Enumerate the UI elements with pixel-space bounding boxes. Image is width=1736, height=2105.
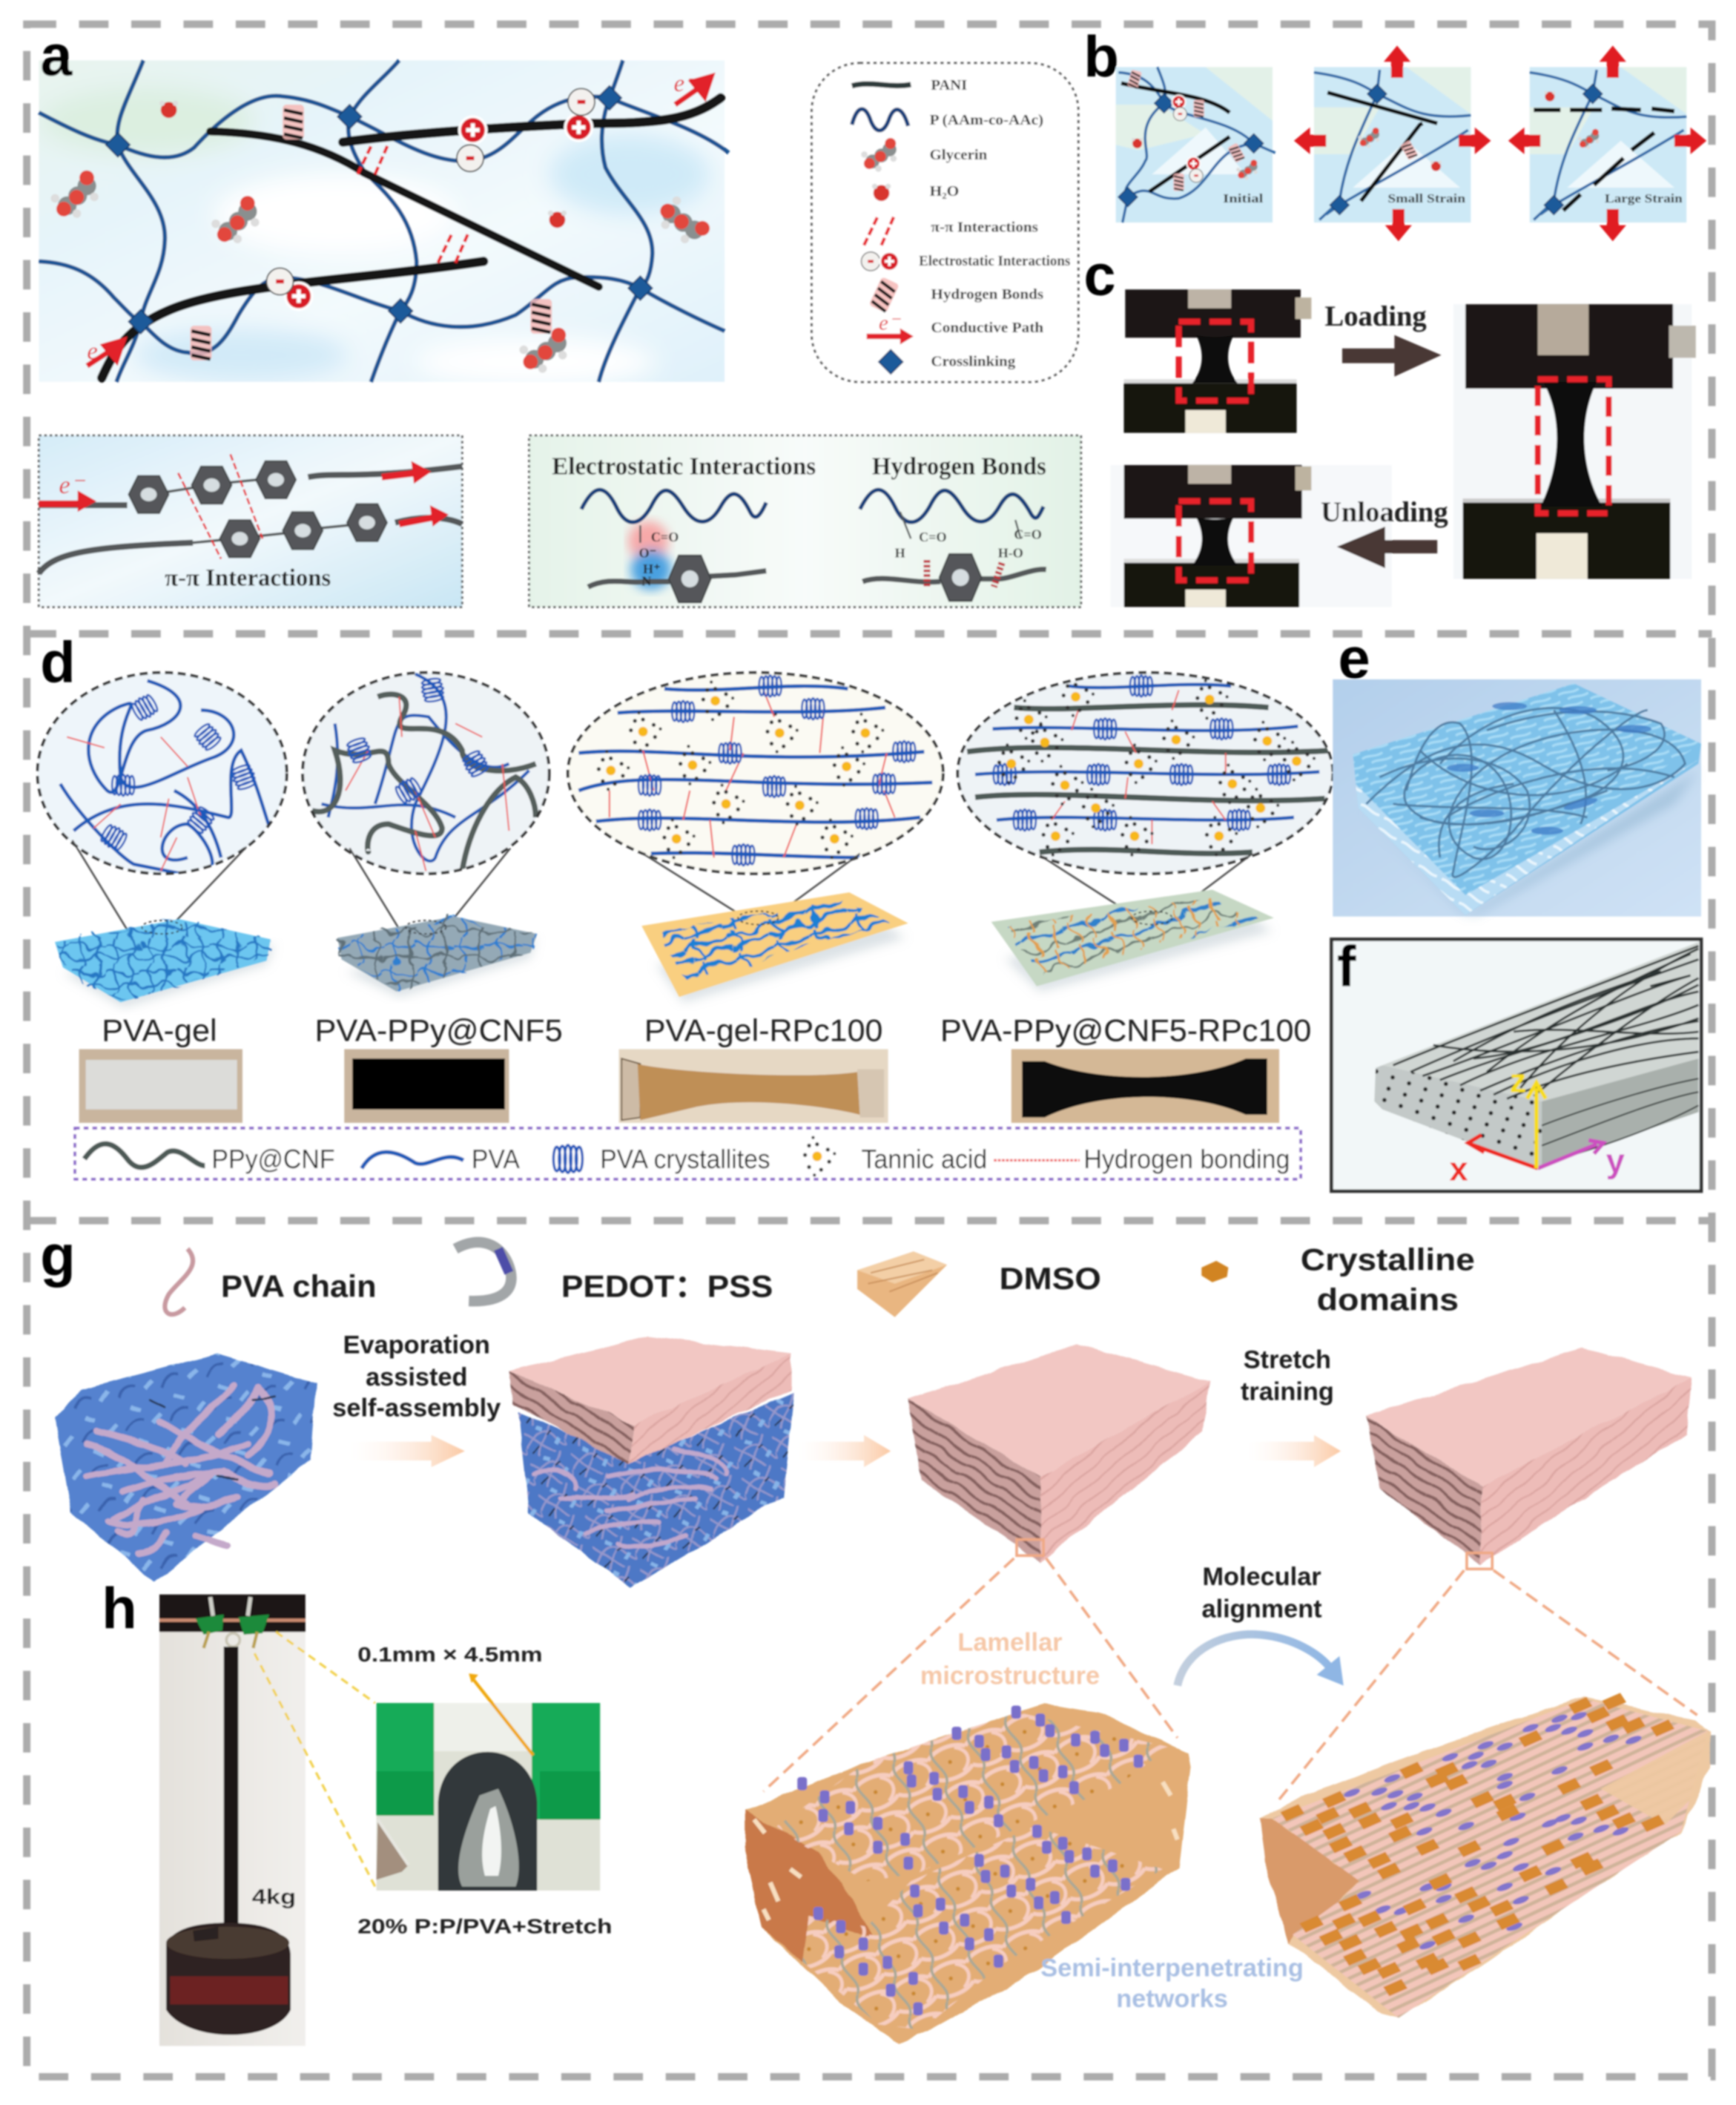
hydrogen bonds	[190, 105, 552, 360]
weave lower region	[802, 1826, 1163, 2030]
sample names: PVA-gel-RPc100	[644, 1013, 882, 1048]
b initial state	[1116, 67, 1275, 223]
label PEDOT PSS: PEDOT：PSS	[561, 1269, 773, 1304]
orange crystalline domains	[1280, 1693, 1674, 1996]
legend row	[165, 1242, 1475, 1317]
panel g letter: g	[40, 1225, 76, 1288]
arrow 2	[797, 1435, 891, 1467]
lower block aligned	[1261, 1693, 1711, 2017]
panel e letter: e	[1339, 627, 1370, 691]
legend icons	[852, 84, 914, 374]
brown end face	[745, 1810, 874, 1962]
grey backbones and rings	[588, 512, 1046, 587]
cube with pink film	[509, 1336, 794, 1588]
panel h: load photo	[102, 1577, 612, 2046]
panel a letter: a	[40, 24, 73, 88]
axes labels: x	[1449, 1150, 1468, 1188]
legend frame	[75, 1128, 1301, 1179]
purple PEDOT dots	[797, 1705, 1143, 2015]
legend row: domains	[1317, 1282, 1459, 1317]
semi-interpenetrating label: Semi-interpenetrating	[1040, 1954, 1304, 1982]
crystallites in slab	[1447, 702, 1651, 834]
panel f letter: f	[1337, 935, 1357, 999]
panel d letter: d	[40, 631, 76, 695]
panel f: aligned fiber block	[1331, 935, 1701, 1191]
legend labels: P (AAm-co-AAc)	[930, 112, 1043, 128]
process step label: Evaporation	[343, 1331, 490, 1360]
lamellar microstructure label: Lamellar	[957, 1629, 1063, 1657]
sample label: 20% P:P/PVA+Stretch	[357, 1915, 612, 1938]
b large strain state	[1530, 67, 1686, 223]
chemical group labels	[639, 527, 1042, 588]
slab background	[1333, 679, 1701, 917]
electron arrows	[39, 461, 449, 527]
electron arrows: e⁻	[59, 471, 86, 499]
panel g: lamellar self-assembly	[40, 1225, 1711, 2043]
conductive path arrows: e⁻	[87, 338, 113, 365]
step label stretch training: Stretch	[1244, 1345, 1331, 1374]
icon PVA chain	[165, 1249, 193, 1314]
fibre lines	[1273, 1699, 1708, 2017]
axes labels: z	[1510, 1061, 1526, 1099]
network legend: PVA	[472, 1144, 521, 1174]
inset frame	[529, 435, 1081, 607]
legend labels: π-π Interactions	[931, 220, 1038, 236]
magnified PVA-gel-RPc100 network	[568, 673, 943, 912]
sample names: PVA-PPy@CNF5	[314, 1013, 563, 1048]
inset photo	[377, 1703, 600, 1891]
photo background	[159, 1595, 306, 2046]
legend labels: Electrostatic Interactions	[919, 253, 1071, 269]
legend labels: Hydrogen Bonds	[931, 286, 1043, 303]
panel e: hydrogel slab	[1333, 627, 1701, 917]
chemical group labels: C=O	[651, 530, 679, 544]
sample strip	[224, 1647, 239, 1944]
arrow 3	[1246, 1435, 1341, 1467]
magnified PVA-PPy@CNF5-RPc100 network	[958, 673, 1333, 915]
panel c: loading photos	[1083, 244, 1696, 607]
crosslink nodes	[106, 86, 653, 334]
label crystalline domains: Crystalline	[1301, 1242, 1475, 1277]
semi-interpenetrating label: networks	[1116, 1985, 1228, 2013]
legend labels: Conductive Path	[931, 320, 1043, 336]
chemical group labels: C=O	[919, 530, 946, 544]
chemical group labels: N	[641, 573, 651, 588]
arrow 1	[349, 1435, 465, 1467]
panel a: PANI network schematic	[39, 24, 729, 386]
green clips	[196, 1615, 269, 1648]
hydrogen bond ticks	[927, 560, 1002, 587]
legend labels: Glycerin	[930, 147, 987, 163]
sample names: PVA-gel	[102, 1013, 217, 1048]
inset headings: Electrostatic Interactions	[552, 452, 816, 481]
inset: pi-pi interactions	[39, 435, 462, 607]
step label stretch training	[1241, 1345, 1334, 1406]
blue hydrogel cube	[55, 1354, 316, 1582]
photo initial	[1124, 289, 1311, 433]
conductive path arrows: e⁻	[674, 70, 699, 97]
b small strain state: Small Strain	[1387, 191, 1466, 205]
magnified PVA-PPy@CNF5 network	[303, 673, 549, 932]
block top face	[1382, 942, 1698, 1101]
weight label: 4kg	[252, 1885, 296, 1909]
pi-pi dashes	[357, 143, 469, 263]
chemical group labels: H-O	[998, 546, 1023, 561]
b initial state: Initial	[1223, 191, 1264, 205]
chemical group labels: H	[895, 546, 905, 561]
block front face	[1374, 1065, 1542, 1168]
polymer waves	[581, 490, 1043, 522]
legend labels: PPy@CNF	[211, 1144, 335, 1174]
chemical group labels: C=O	[1014, 527, 1042, 541]
inset: electrostatic and hydrogen bonds: Hydrogen Bonds	[872, 452, 1046, 481]
block side face	[1542, 1058, 1698, 1166]
unloading label: Unloading	[1321, 496, 1448, 528]
water and glycerin molecules	[47, 101, 712, 373]
icon DMSO	[857, 1251, 947, 1317]
slab body	[1353, 683, 1701, 915]
red dashed stacking lines	[178, 454, 263, 559]
network background	[39, 60, 725, 386]
network legend	[75, 1128, 1301, 1179]
label PVA chain: PVA chain	[221, 1269, 377, 1304]
unloading arrow	[1337, 527, 1437, 568]
molecular alignment label: alignment	[1202, 1595, 1322, 1623]
legend labels: PANI	[931, 77, 967, 93]
purple PEDOT segments	[1342, 1710, 1643, 1951]
sample names	[102, 1013, 1311, 1048]
axes labels	[1449, 1061, 1625, 1188]
block body	[745, 1704, 1191, 2043]
network legend: PVA crystallites	[600, 1144, 770, 1174]
red strain arrows	[1294, 46, 1706, 241]
panel d: PVA network series	[38, 631, 1333, 1179]
panel b: strain mechanism	[1083, 25, 1706, 241]
block body	[1261, 1696, 1711, 2017]
panel a legend	[812, 63, 1078, 382]
weight	[166, 1923, 291, 2035]
slab 1	[55, 919, 274, 1007]
legend labels: H₂O	[930, 183, 959, 200]
panel h letter: h	[102, 1577, 137, 1641]
legend labels	[919, 77, 1071, 369]
network legend: Tannic acid	[861, 1144, 987, 1174]
icon PEDOT PSS	[455, 1242, 511, 1301]
label DMSO: DMSO	[1000, 1261, 1101, 1296]
process step label	[332, 1331, 501, 1422]
photo stretched	[1453, 304, 1696, 579]
end face flecks	[754, 1782, 1178, 1920]
pink lamellar cube 2	[1366, 1348, 1692, 1565]
slab 4	[991, 890, 1274, 992]
curved arrow	[1178, 1634, 1344, 1685]
weave top region	[777, 1713, 1169, 1881]
b large strain state: Large Strain	[1605, 191, 1683, 205]
loading label: Loading	[1324, 300, 1427, 332]
left end face	[1261, 1818, 1359, 1943]
legend frame	[812, 63, 1078, 382]
inset: electrostatic and hydrogen bonds	[529, 435, 1081, 607]
chemical group labels: H⁺	[643, 561, 661, 576]
conductive path arrows	[87, 70, 711, 366]
legend labels: Crosslinking	[931, 353, 1015, 369]
slab shadow	[1359, 771, 1698, 917]
loading arrow	[1342, 335, 1442, 377]
lamellar microstructure label	[920, 1629, 1100, 1690]
process step label: assisted	[366, 1363, 467, 1391]
icon crystalline domain	[1201, 1261, 1228, 1282]
panel b letter: b	[1083, 25, 1119, 89]
zoom boxes and lines	[764, 1540, 1697, 1799]
inset frame	[39, 435, 462, 607]
sample photos	[79, 1049, 1279, 1123]
slab 2	[337, 917, 537, 997]
semi-interpenetrating label	[1040, 1954, 1304, 2013]
slab 3	[641, 892, 908, 1002]
inset title: π-π Interactions	[165, 564, 331, 591]
chemical group labels: O⁻	[639, 546, 656, 561]
magnified PVA-gel network	[38, 673, 287, 930]
black PANI chains	[102, 98, 721, 378]
slab fibers	[1366, 708, 1685, 877]
top fibers	[1393, 946, 1698, 1160]
benzene rings	[128, 461, 387, 558]
step label stretch training: training	[1241, 1378, 1334, 1406]
sample names: PVA-PPy@CNF5-RPc100	[940, 1013, 1311, 1048]
lower block lamellar	[745, 1704, 1191, 2043]
lamellar microstructure label: microstructure	[920, 1662, 1100, 1690]
b small strain state	[1314, 67, 1471, 223]
molecular alignment label	[1202, 1563, 1322, 1623]
legend icons: e⁻	[879, 311, 902, 335]
network legend: Hydrogen bonding	[1083, 1144, 1290, 1174]
rings	[669, 554, 982, 602]
blue polymer chains	[39, 60, 729, 382]
charge glows	[628, 521, 671, 590]
clamp band	[159, 1595, 306, 1632]
legend icons	[85, 1144, 205, 1167]
pink lamellar cube 1	[908, 1344, 1209, 1562]
axes labels: y	[1606, 1142, 1625, 1180]
process step label: self-assembly	[332, 1394, 501, 1422]
gold pointer	[469, 1673, 533, 1755]
size label: 0.1mm × 4.5mm	[357, 1643, 543, 1666]
panel c letter: c	[1083, 244, 1116, 308]
yellow dashed zoom lines	[254, 1632, 375, 1886]
tan right end	[1601, 1731, 1708, 1825]
axes arrows	[1468, 1083, 1603, 1168]
photo recovered	[1110, 465, 1392, 607]
molecular alignment label: Molecular	[1202, 1563, 1321, 1591]
grey chains	[39, 467, 462, 573]
ions	[266, 88, 595, 309]
frame	[1331, 939, 1701, 1191]
